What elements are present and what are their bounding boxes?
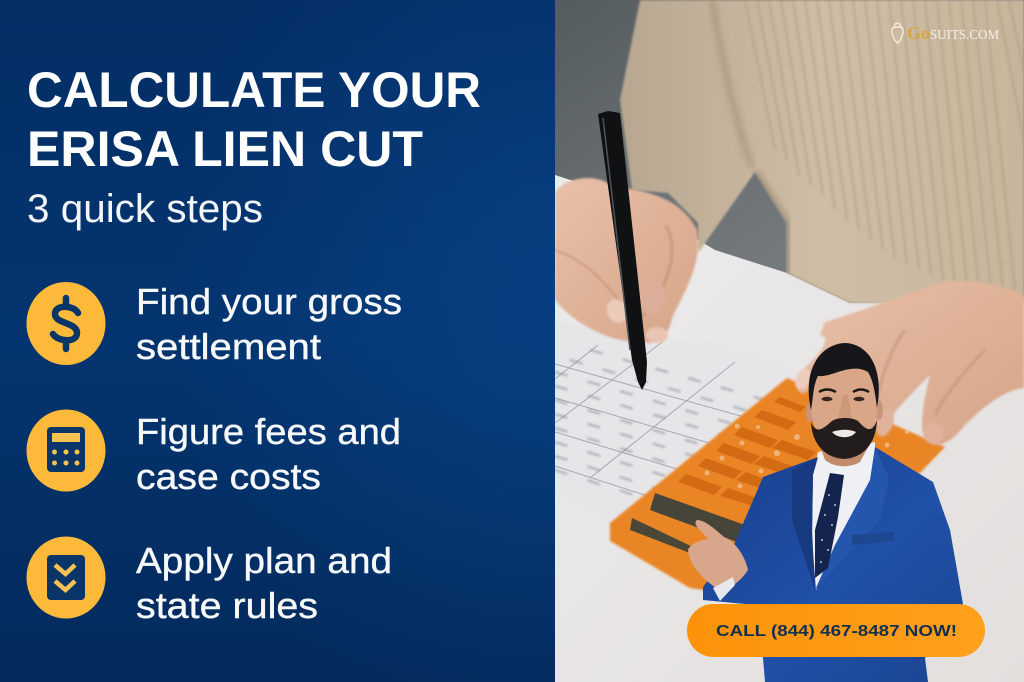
icon: checklist chevrons xyxy=(26,536,106,618)
left navy panel xyxy=(0,0,555,682)
step 2 text xyxy=(136,411,401,497)
step 1 text: Find your gross xyxy=(136,281,402,322)
photo: hands on calculator at desk xyxy=(555,0,1024,682)
step 2 text: Figure fees and xyxy=(136,411,401,452)
logo: GoSuits.com xyxy=(892,23,999,43)
white shirt xyxy=(812,442,875,590)
shirt cuff xyxy=(713,577,735,601)
step 1 text: settlement xyxy=(136,326,321,367)
jacket lapels xyxy=(815,447,889,590)
calculator keys xyxy=(678,397,816,506)
logo: GoSuits.com: Go xyxy=(907,23,930,43)
eyebrows and eyes xyxy=(819,390,869,401)
ears xyxy=(806,402,813,422)
pointing hand xyxy=(688,520,748,589)
sheet of paper with figures xyxy=(555,341,764,496)
attorney portrait xyxy=(688,343,963,682)
step 3 text xyxy=(136,540,392,626)
photo background wall xyxy=(555,0,1024,320)
logo: GoSuits.com: SUITS.COM xyxy=(930,27,999,42)
icon: calculator xyxy=(26,410,106,492)
hair xyxy=(809,343,879,410)
step 2 xyxy=(26,410,401,497)
call to action button: CALL (844) 467-8487 NOW! xyxy=(716,623,957,640)
subtitle: 3 quick steps xyxy=(27,187,263,231)
beige sweater xyxy=(620,0,1024,305)
step 3 xyxy=(26,536,392,626)
neck xyxy=(821,446,869,466)
title: ERISA LIEN CUT xyxy=(27,121,423,177)
step 1 xyxy=(26,281,402,367)
title: CALCULATE YOUR xyxy=(27,62,481,118)
step 1 text xyxy=(136,281,402,367)
nose shading xyxy=(838,395,852,418)
fingernails xyxy=(606,298,626,324)
left hand holding pen xyxy=(555,178,698,343)
desk surface xyxy=(555,175,1024,682)
polka dot tie xyxy=(815,473,844,578)
black pen xyxy=(598,111,647,390)
step 2 text: case costs xyxy=(136,456,321,497)
pocket square line xyxy=(852,532,894,545)
suit jacket xyxy=(703,447,963,682)
fingernails xyxy=(794,368,811,390)
step 3 text: Apply plan and xyxy=(136,540,392,581)
step 3 text: state rules xyxy=(136,585,318,626)
title xyxy=(27,62,481,177)
right hand on keys xyxy=(792,281,1024,445)
call to action button xyxy=(687,604,985,657)
orange calculator xyxy=(610,378,945,600)
beard xyxy=(811,418,877,459)
icon: shield padlock xyxy=(892,23,903,43)
face xyxy=(811,368,878,430)
icon: dollar sign xyxy=(26,282,106,365)
